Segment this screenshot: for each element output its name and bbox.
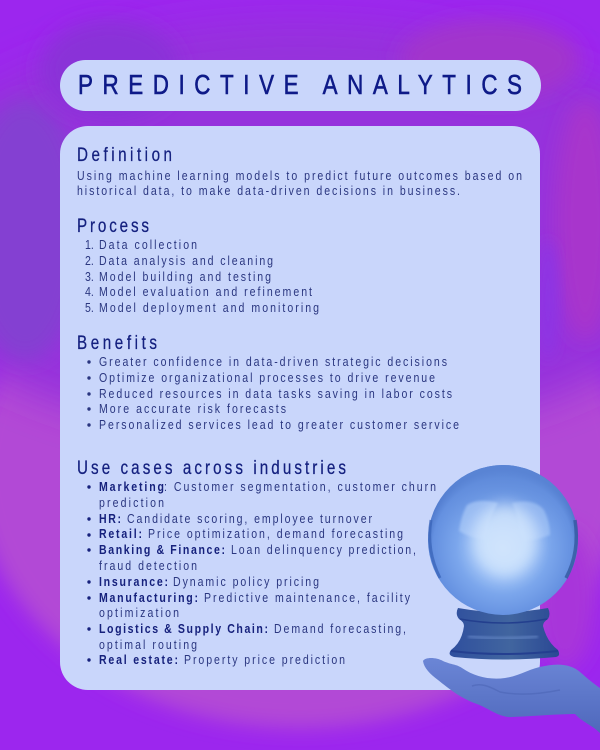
section: use cases: Use cases across industries	[77, 456, 346, 478]
section: process: 5.	[85, 300, 94, 315]
section: process: Model evaluation and refinement	[99, 284, 313, 299]
section: process: Model deployment and monitoring	[99, 300, 319, 315]
section: use cases: Predictive maintenance, facility	[204, 590, 410, 605]
section: process: 2.	[85, 253, 94, 268]
section: use cases: prediction	[99, 495, 164, 510]
section: use cases: Real estate:	[99, 652, 178, 667]
section: process: Model building and testing	[99, 269, 271, 284]
section: definition: historical data, to make data-driven decisions in business.	[77, 183, 460, 198]
title: PREDICTIVE ANALYTICS	[78, 70, 522, 101]
section: use cases: Property price prediction	[184, 652, 345, 667]
section: benefits: More accurate risk forecasts	[99, 401, 286, 416]
hand	[423, 658, 600, 733]
section: use cases: Logistics & Supply Chain:	[99, 621, 268, 636]
section: use cases: optimal routing	[99, 637, 197, 652]
section: use cases: Manufacturing:	[99, 590, 198, 605]
section: use cases: : Customer segmentation, customer churn	[164, 479, 436, 494]
section: use cases: fraud detection	[99, 558, 197, 573]
section: use cases: Marketing	[99, 479, 164, 494]
section: use cases: Banking & Finance:	[99, 542, 225, 557]
section: benefits: Personalized services lead to greater customer service	[99, 417, 459, 432]
section: process: 1.	[85, 237, 94, 252]
section: process: 3.	[85, 269, 94, 284]
panel: content	[60, 126, 540, 690]
section: definition: Definition	[77, 143, 172, 165]
section: use cases: Demand forecasting,	[274, 621, 406, 636]
section: use cases: Insurance:	[99, 574, 168, 589]
section: process: Data analysis and cleaning	[99, 253, 273, 268]
section: benefits: Reduced resources in data tasks saving in labor costs	[99, 386, 452, 401]
section: benefits: Benefits	[77, 331, 157, 353]
section: process	[77, 214, 319, 315]
section: use cases: Dynamic policy pricing	[173, 574, 319, 589]
section: benefits	[77, 331, 459, 432]
section: use cases	[77, 456, 436, 667]
glass sphere	[428, 465, 578, 615]
section: use cases: Price optimization, demand forecasting	[148, 526, 403, 541]
section: use cases: Retail:	[99, 526, 142, 541]
section: benefits: Greater confidence in data-driven strategic decisions	[99, 354, 447, 369]
section: definition: Using machine learning models to predict future outcomes based on	[77, 168, 522, 183]
section: use cases: Loan delinquency prediction,	[231, 542, 416, 557]
section: benefits: Optimize organizational processes to drive revenue	[99, 370, 435, 385]
section: definition	[77, 143, 522, 198]
section: use cases: HR:	[99, 511, 121, 526]
icon: crystal ball on stand	[423, 465, 600, 733]
section: process: Data collection	[99, 237, 197, 252]
section: process: Process	[77, 214, 149, 236]
stand	[450, 608, 559, 660]
section: use cases: Candidate scoring, employee turnover	[127, 511, 372, 526]
title banner	[60, 60, 541, 111]
section: use cases: optimization	[99, 605, 179, 620]
section: process: 4.	[85, 284, 94, 299]
